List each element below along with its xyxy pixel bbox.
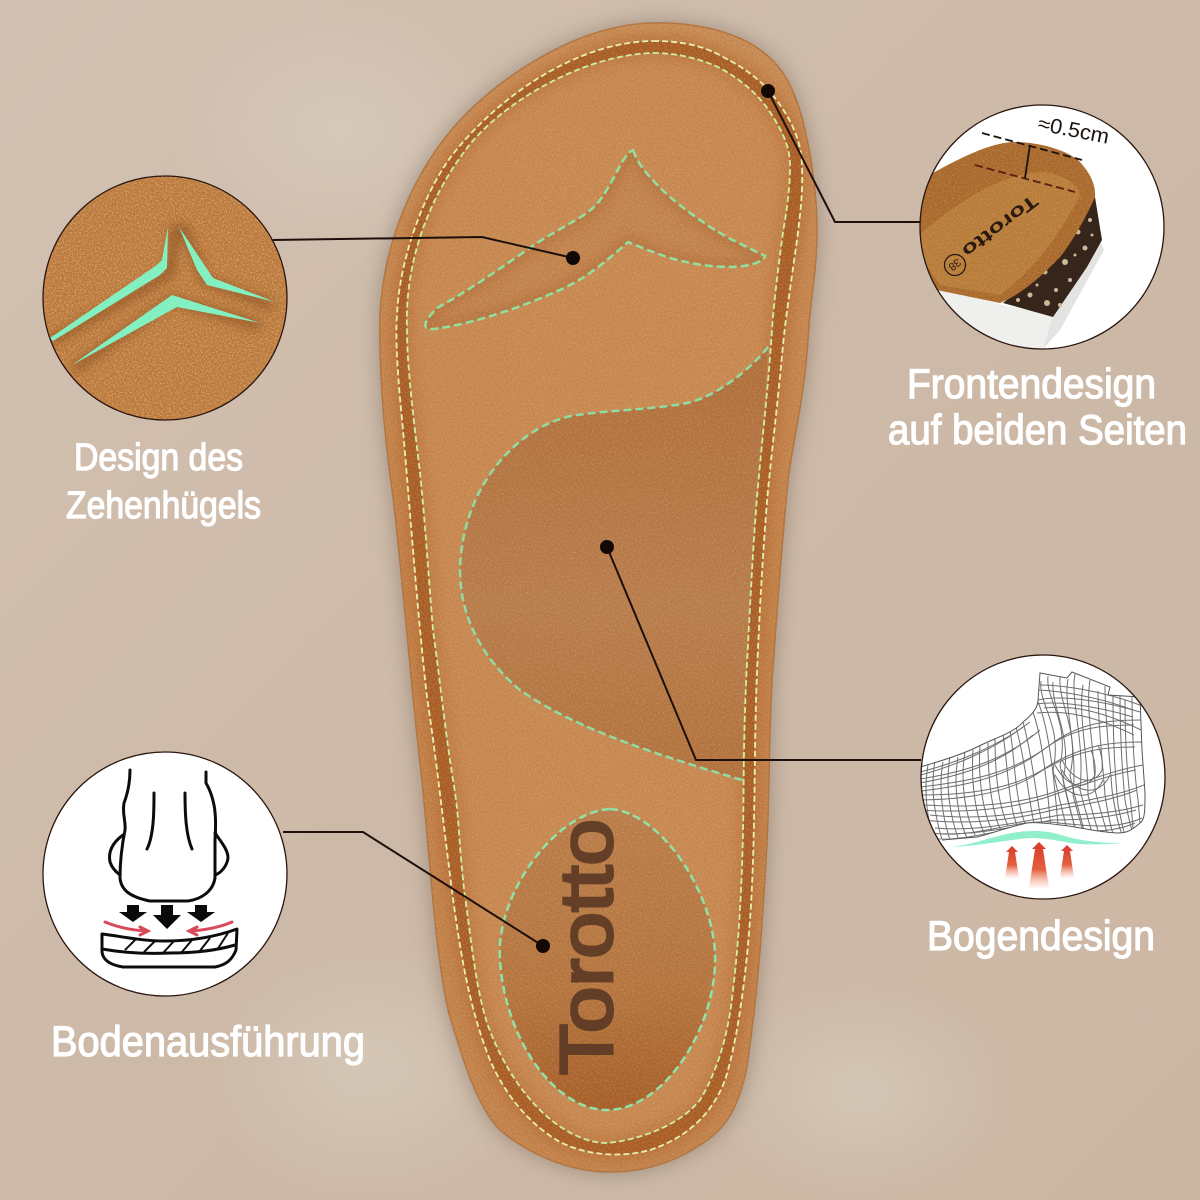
arch fill	[460, 347, 768, 780]
heading: toe ridge design: Zehenhügels	[66, 485, 261, 527]
heading: sole design: Bodenausführung	[51, 1018, 365, 1066]
heel cup fill	[500, 809, 715, 1110]
suede footbed	[919, 142, 1095, 303]
heading: front design: Frontendesign	[907, 360, 1156, 407]
suede texture	[370, 15, 830, 1180]
leader line: toe ridge	[273, 237, 580, 265]
insole	[370, 15, 830, 1180]
footbed centre	[919, 172, 1080, 295]
light glow around insole	[170, 0, 1010, 1200]
cork side wall	[1003, 197, 1102, 317]
leader line: front edge	[761, 84, 920, 222]
toe ridge fill	[425, 150, 765, 329]
mint ridge shapes	[50, 227, 275, 365]
callout circle: arch mesh	[913, 655, 1165, 899]
heading: front design	[888, 360, 1187, 453]
heading: arch design: Bogendesign	[927, 912, 1155, 959]
icon: compression arrows	[105, 922, 232, 935]
stitched channel	[396, 41, 802, 1155]
callout circle: toe ridge detail	[40, 175, 290, 421]
icon: foot from behind	[110, 770, 228, 901]
depth dashes	[975, 133, 1082, 192]
leader line: arch	[600, 540, 921, 760]
brand imprint: Torotto	[545, 819, 628, 1075]
callout circle: sole cross section	[43, 752, 287, 996]
mint arch support	[953, 831, 1123, 847]
foot wireframe	[913, 672, 1145, 845]
inner footbed	[407, 53, 790, 1143]
inner stitching	[407, 53, 790, 1143]
heel stitching	[500, 809, 715, 1110]
rim shading	[396, 41, 802, 1155]
arch stitching	[460, 347, 768, 780]
brand on footbed: Torotto	[958, 191, 1042, 261]
insole shadow	[380, 23, 817, 1172]
icon: pressure arrows	[119, 905, 215, 929]
support arrows	[1005, 842, 1074, 888]
toe ridge shading	[425, 150, 765, 329]
footbed edge shading	[407, 53, 790, 1143]
toe ridge stitching	[425, 150, 765, 329]
size mark	[944, 254, 966, 276]
callout circle: front edge detail	[915, 105, 1164, 349]
icon: sole section	[102, 929, 237, 967]
heading: toe ridge design	[66, 437, 261, 527]
heading: toe ridge design: Design des	[74, 437, 243, 479]
insole rim	[380, 23, 817, 1172]
cork shadow	[1043, 240, 1104, 349]
measurement label: ≈0.5cm	[1036, 112, 1111, 149]
leader line: heel	[283, 832, 550, 953]
packaging box	[939, 290, 1052, 348]
size mark: 38	[946, 256, 963, 273]
outer stitching	[396, 41, 802, 1155]
